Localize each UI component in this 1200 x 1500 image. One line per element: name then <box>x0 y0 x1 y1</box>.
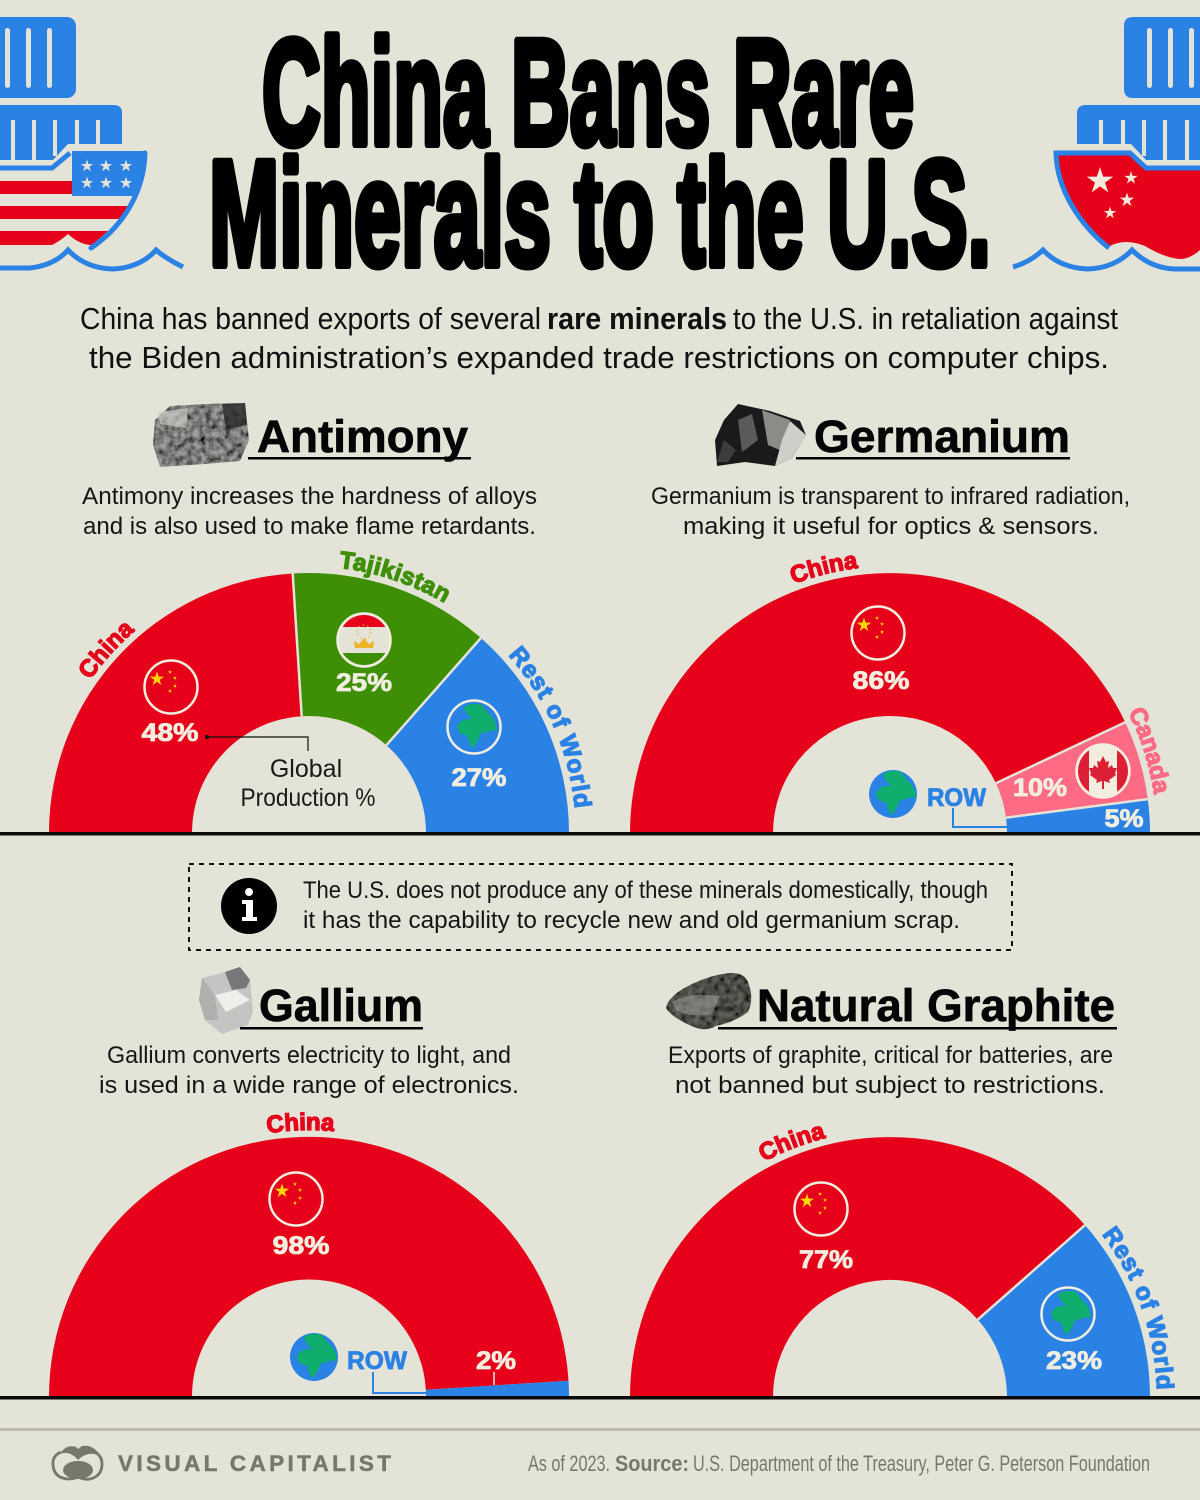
flag: Canada <box>1076 744 1130 798</box>
label: China: China <box>790 555 859 582</box>
chart: Gallium production <box>49 1112 569 1396</box>
description: Antimony: Antimony increases the hardness of alloys <box>82 483 537 510</box>
baseline: lower charts <box>0 1396 1200 1400</box>
description: Germanium: Germanium is transparent to infrared radiation, <box>651 483 1130 510</box>
source note <box>528 1451 1150 1476</box>
source note: As of 2023. <box>528 1451 610 1476</box>
label: ROW: ROW <box>347 1347 407 1375</box>
logo: Visual Capitalist <box>53 1446 391 1479</box>
connector: 2% <box>493 1372 495 1385</box>
subtitle: the Biden administration’s expanded trade restrictions on computer chips. <box>89 340 1109 375</box>
leader line <box>206 736 308 751</box>
value: 10%: 10% <box>1013 774 1067 802</box>
segment: Rest of World 23% <box>978 1225 1150 1397</box>
callout text: The U.S. does not produce any of these minerals domestically, though <box>303 877 988 904</box>
segment: Rest of World 2% <box>426 1381 569 1397</box>
label: China: China <box>266 1112 335 1133</box>
icon: globe <box>448 700 500 754</box>
value: 23%: 23% <box>1046 1347 1102 1375</box>
label: Canada: Canada <box>1130 708 1170 796</box>
segment: Rest of World 5% <box>1006 799 1150 833</box>
icon: gallium rock <box>199 967 253 1034</box>
icon: info <box>221 878 277 934</box>
legend: Global Production %: Production % <box>240 784 376 812</box>
value: 48%: 48% <box>142 719 198 747</box>
segment: China 86% <box>630 573 1125 833</box>
value: 27%: 27% <box>452 764 506 792</box>
chart: Natural Graphite production <box>630 1126 1175 1396</box>
segment: Tajikistan 25% <box>293 573 481 745</box>
source note: Source: <box>615 1451 689 1476</box>
flag: China <box>852 606 904 660</box>
label: ROW: ROW <box>927 784 986 812</box>
heading: Germanium: Germanium <box>814 411 1070 462</box>
value: 2%: 2% <box>476 1347 516 1375</box>
description: Gallium: Gallium converts electricity to light, and <box>107 1042 511 1069</box>
subtitle: China has banned exports of several <box>80 301 541 336</box>
value: 98%: 98% <box>272 1232 330 1260</box>
heading: Antimony: Antimony <box>257 411 468 462</box>
description: Natural Graphite <box>668 1042 1113 1099</box>
icon: globe <box>869 770 917 818</box>
segment: Rest of World 27% <box>386 638 569 833</box>
heading: Natural Graphite: Natural Graphite <box>757 980 1115 1031</box>
segment: China 77% <box>630 1137 1085 1397</box>
segment: Canada 10% <box>996 722 1148 818</box>
label: Rest of World: Rest of World <box>1102 1225 1175 1389</box>
footer rule <box>0 1428 1200 1431</box>
connector: ROW <box>373 1372 426 1393</box>
flag: China <box>270 1172 322 1226</box>
label: China: China <box>759 1126 827 1160</box>
segment: China 48% <box>49 574 302 833</box>
icon: US container ship <box>0 17 183 269</box>
title <box>209 8 991 297</box>
description: Antimony: and is also used to make flame retardants. <box>83 513 536 540</box>
icon: germanium rock <box>715 404 806 466</box>
panel: Gallium <box>49 967 569 1396</box>
icon: antimony rock <box>153 403 249 467</box>
callout text <box>303 877 988 934</box>
subtitle <box>80 301 1118 375</box>
icon: logo mark <box>53 1446 102 1479</box>
chart: Antimony production <box>49 550 593 832</box>
description: Gallium: is used in a wide range of electronics. <box>99 1072 519 1099</box>
chart: Germanium production <box>630 555 1170 833</box>
value: 25%: 25% <box>336 669 392 697</box>
flag: China <box>144 660 198 714</box>
legend: Global Production % <box>240 755 376 812</box>
wordmark: VISUAL CAPITALIST <box>118 1451 391 1476</box>
callout text: it has the capability to recycle new and old germanium scrap. <box>303 907 960 934</box>
label: China: China <box>79 623 136 677</box>
flag: Tajikistan <box>338 614 390 666</box>
icon: globe <box>1042 1288 1094 1340</box>
panel: Germanium <box>630 404 1170 833</box>
value: 86%: 86% <box>852 667 910 695</box>
connector: ROW <box>953 808 1007 827</box>
callout: info box <box>189 864 1012 950</box>
value: 77%: 77% <box>799 1246 853 1274</box>
panel: Natural Graphite <box>630 973 1175 1396</box>
description: Gallium <box>99 1042 519 1099</box>
description: Natural Graphite: Exports of graphite, critical for batteries, are <box>668 1042 1113 1069</box>
value: 5%: 5% <box>1104 805 1144 833</box>
description: Germanium: making it useful for optics & sensors. <box>683 513 1099 540</box>
panel: Antimony <box>49 403 593 832</box>
icon: China container ship <box>1013 17 1200 269</box>
subtitle: rare minerals <box>547 301 727 336</box>
segment: China 98% <box>49 1137 568 1397</box>
icon: graphite rock <box>666 973 751 1029</box>
label: Tajikistan: Tajikistan <box>340 550 449 604</box>
flag: China <box>794 1182 848 1236</box>
description: Antimony <box>82 483 537 540</box>
subtitle: to the U.S. in retaliation against <box>733 301 1118 336</box>
label: Rest of World: Rest of World <box>508 644 593 808</box>
description: Germanium <box>651 483 1130 540</box>
heading: Gallium: Gallium <box>259 980 423 1031</box>
icon: globe <box>290 1333 338 1381</box>
description: Natural Graphite: not banned but subject to restrictions. <box>675 1072 1105 1099</box>
legend: Global Production %: Global <box>270 755 342 783</box>
baseline: upper charts <box>0 832 1200 836</box>
